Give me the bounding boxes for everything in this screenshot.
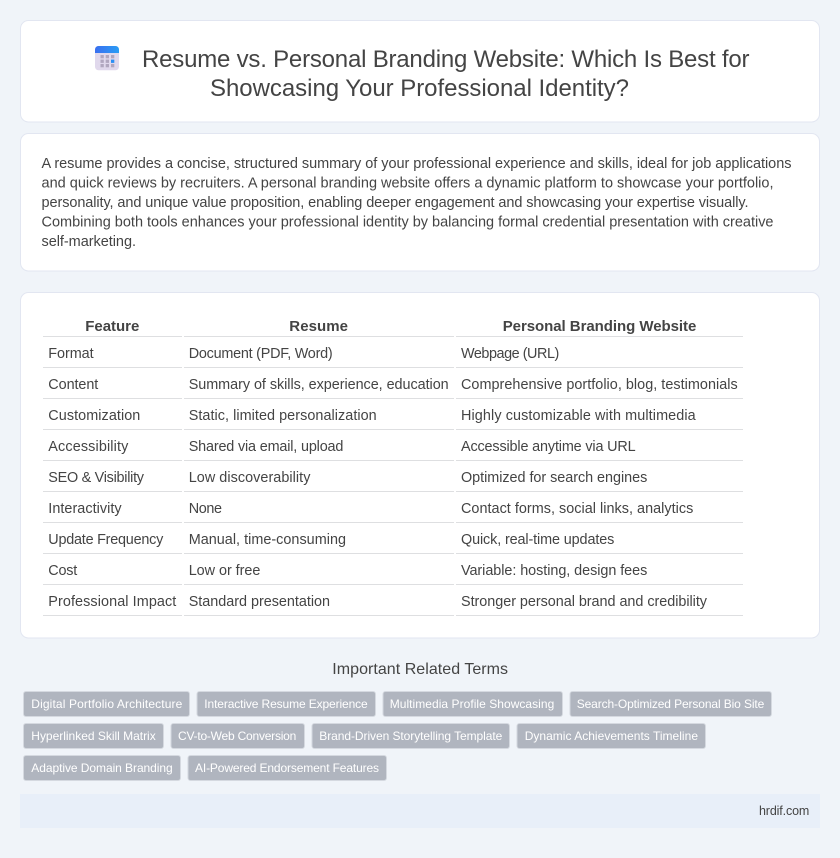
table header [85, 318, 696, 335]
table column: resume: Shared via email, upload [189, 439, 343, 455]
tags: related terms: AI-Powered Endorsement Features [195, 761, 379, 775]
panel: comparison table [20, 292, 820, 638]
table column: personal branding website [461, 346, 738, 610]
footer: hrdif.com [759, 804, 809, 818]
table column: feature: Update Frequency [48, 532, 164, 548]
panel: summary [20, 134, 820, 271]
table column: personal branding website: Accessible anytime via URL [461, 439, 636, 455]
table column: feature: Interactivity [48, 501, 122, 517]
tags: related terms: Interactive Resume Experience [204, 697, 368, 711]
tags: related terms: Multimedia Profile Showcasing [390, 697, 554, 711]
tags: related terms: Adaptive Domain Branding [31, 761, 173, 775]
heading: important related terms: Important Related Terms [332, 661, 508, 678]
table column: resume: Standard presentation [189, 594, 330, 610]
tags: related terms: Search-Optimized Personal Bio Site [577, 697, 765, 711]
table column: resume: Manual, time-consuming [189, 532, 346, 548]
table column: feature: Accessibility [48, 439, 129, 455]
text block: summary paragraph: Combining both tools enhances your professional identity by balancing formal credential presentation with creative [42, 214, 774, 230]
text block: summary paragraph: self-marketing. [42, 234, 136, 250]
table column: feature: Format [48, 346, 94, 362]
table column: resume: Static, limited personalization [189, 408, 377, 424]
footer [20, 794, 820, 828]
tags: related terms: Brand-Driven Storytelling Template [319, 729, 503, 743]
table header: Resume [289, 318, 348, 335]
tags: related terms: CV-to-Web Conversion [178, 729, 296, 743]
table header: Feature [85, 318, 139, 335]
table column: resume: Low or free [189, 563, 260, 579]
table column: personal branding website: Variable: hosting, design fees [461, 563, 647, 579]
tags: related terms: Digital Portfolio Architecture [31, 697, 183, 711]
table column: feature [48, 346, 176, 610]
table column: resume: Low discoverability [189, 470, 311, 486]
title [142, 46, 750, 102]
table column: personal branding website: Highly customizable with multimedia [461, 408, 696, 424]
table column: feature: Cost [48, 563, 77, 579]
table column: personal branding website: Contact forms, social links, analytics [461, 501, 693, 517]
text block: summary paragraph: personality, and unique value proposition, enabling deeper engagement and showcasing your expertise visually. [42, 195, 748, 211]
title: Showcasing Your Professional Identity? [210, 75, 629, 102]
text block: summary paragraph: and quick reviews by recruiters. A personal branding website offers a dynamic platform to showcase your portfolio, [42, 175, 774, 191]
tags: related terms [24, 692, 772, 780]
panel: header [20, 20, 820, 122]
table column: personal branding website: Webpage (URL) [461, 346, 559, 362]
table column: resume: Summary of skills, experience, education [189, 377, 449, 393]
table column: feature: Customization [48, 408, 140, 424]
title: Resume vs. Personal Branding Website: Which Is Best for [142, 46, 750, 73]
text block: summary paragraph [42, 156, 792, 250]
tags: related terms: Hyperlinked Skill Matrix [31, 729, 156, 743]
table column: personal branding website: Optimized for search engines [461, 470, 647, 486]
table column: feature: SEO & Visibility [48, 470, 145, 486]
table column: resume [189, 346, 449, 610]
icon: calendar [95, 46, 119, 70]
table column: resume: Document (PDF, Word) [189, 346, 333, 362]
text block: summary paragraph: A resume provides a concise, structured summary of your professional experience and skills, ideal for job applications [42, 156, 792, 172]
table column: feature: Professional Impact [48, 594, 176, 610]
table column: feature: Content [48, 377, 98, 393]
table column: personal branding website: Comprehensive portfolio, blog, testimonials [461, 377, 738, 393]
table column: personal branding website: Stronger personal brand and credibility [461, 594, 708, 610]
tags: related terms: Dynamic Achievements Timeline [525, 729, 698, 743]
table column: resume: None [189, 501, 222, 517]
table column: personal branding website: Quick, real-time updates [461, 532, 614, 548]
table header: Personal Branding Website [503, 318, 696, 335]
